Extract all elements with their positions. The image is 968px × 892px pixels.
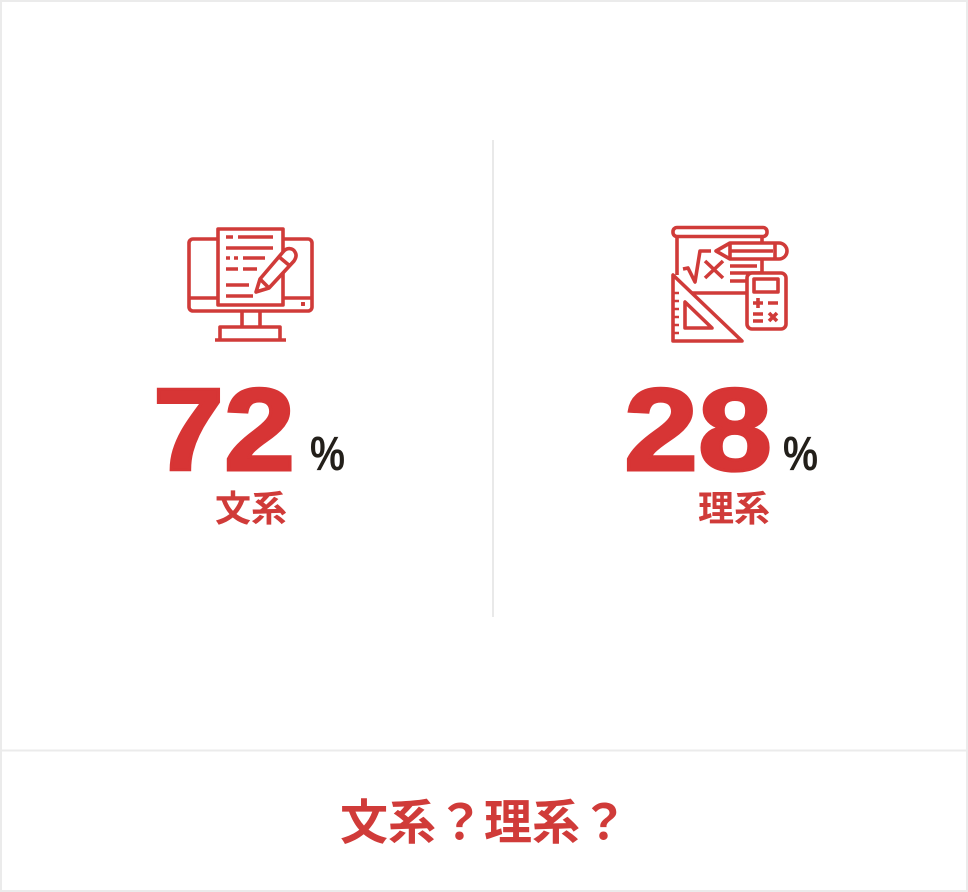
value: 28 percent xyxy=(624,364,818,495)
icon: monitor with document and pencil xyxy=(189,229,312,340)
icon: math board, ruler and calculator xyxy=(673,228,787,341)
panel: sciences xyxy=(624,228,818,529)
label: humanities: 文系 xyxy=(215,488,287,529)
value: 28 percent: % xyxy=(783,428,818,481)
label: sciences: 理系 xyxy=(698,488,770,529)
title: 文系？理系？ xyxy=(340,797,628,850)
value: 72 percent xyxy=(153,364,345,495)
panel: humanities xyxy=(153,229,345,529)
value: 72 percent: % xyxy=(310,428,345,481)
value: 72 percent: 72 xyxy=(153,364,295,495)
value: 28 percent: 28 xyxy=(624,364,772,495)
